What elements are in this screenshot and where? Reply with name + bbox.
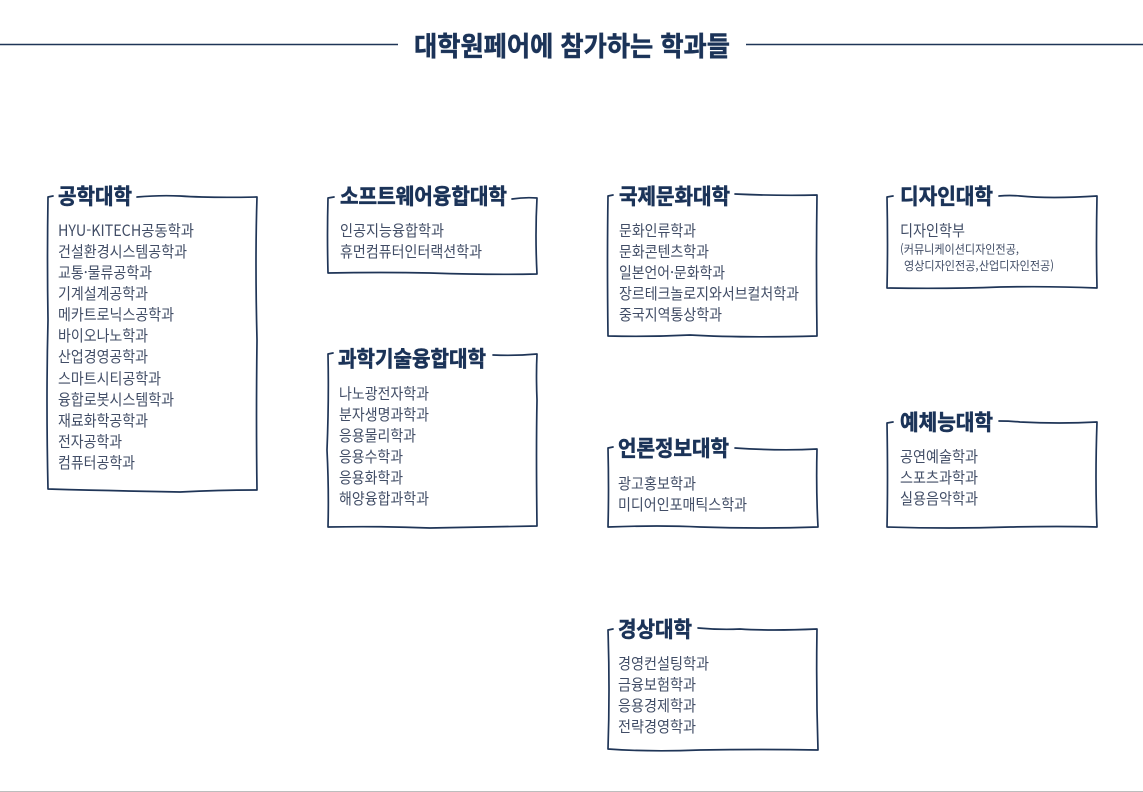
department list: 광고홍보학과 [618, 472, 696, 494]
heading: 소프트웨어융합대학 [340, 180, 507, 211]
title rule right [746, 44, 1143, 46]
department list: 융합로봇시스템학과 [58, 388, 174, 410]
title: 대학원페어에 참가하는 학과들 [414, 25, 730, 64]
department list: HYU-KITECH공동학과 [58, 219, 194, 241]
heading: 디자인대학 [900, 180, 993, 211]
department list: 건설환경시스템공학과 [58, 240, 187, 262]
panel frame [327, 353, 537, 528]
department list: 교통·물류공학과 [58, 261, 152, 283]
department list: 중국지역통상학과 [619, 303, 722, 325]
department list: 일본언어·문화학과 [619, 261, 725, 283]
heading: 언론정보대학 [618, 432, 729, 463]
department list: 장르테크놀로지와서브컬처학과 [619, 282, 799, 304]
department list: 스마트시티공학과 [58, 367, 161, 389]
department list: 스포츠과학과 [900, 466, 978, 488]
department list [58, 219, 194, 473]
department list: 나노광전자학과 [339, 382, 429, 404]
department list [619, 219, 799, 325]
title rule left [0, 44, 398, 46]
panel: 공학대학 [47, 180, 257, 492]
heading: 과학기술융합대학 [338, 342, 486, 374]
department list: 공연예술학과 [900, 445, 978, 467]
department list: 인공지능융합학과 [340, 219, 444, 241]
department list: 미디어인포매틱스학과 [618, 493, 747, 515]
department list: 문화콘텐츠학과 [619, 240, 709, 262]
department list: 분자생명과학과 [339, 403, 429, 425]
panel: 소프트웨어융합대학 [328, 180, 537, 274]
department list: 해양융합과학과 [339, 487, 429, 509]
department list [618, 472, 747, 515]
department list: 응용화학과 [339, 466, 403, 488]
department list: 전략경영학과 [618, 715, 696, 737]
department list [340, 219, 482, 262]
heading: 경상대학 [618, 613, 692, 644]
department list: 금융보험학과 [618, 673, 696, 695]
panel frame [608, 194, 817, 337]
panel: 예체능대학 [887, 406, 1097, 528]
panel: 디자인대학 [887, 180, 1097, 288]
department list: 응용경제학과 [618, 694, 696, 716]
panel: 과학기술융합대학 [327, 342, 537, 528]
department list: 기계설계공학과 [58, 282, 148, 304]
department list: 디자인학부 [900, 219, 965, 241]
panel frame [47, 196, 257, 492]
department list: 실용음악학과 [900, 487, 978, 509]
department list [339, 382, 429, 509]
heading: 국제문화대학 [619, 180, 730, 211]
department list: 전자공학과 [58, 430, 122, 452]
department list: 응용수학과 [339, 445, 403, 467]
panel frame [887, 196, 1097, 288]
heading: 예체능대학 [900, 406, 993, 437]
panel frame [608, 447, 818, 528]
panel: 국제문화대학 [608, 180, 817, 337]
department list: 산업경영공학과 [58, 345, 148, 367]
panel: 경상대학 [608, 613, 818, 751]
panel frame [887, 421, 1097, 528]
department list [900, 445, 978, 509]
department list: 메카트로닉스공학과 [58, 303, 174, 325]
panel frame [328, 197, 537, 274]
heading: 공학대학 [58, 180, 132, 211]
department list: 휴먼컴퓨터인터랙션학과 [340, 240, 482, 262]
department list [618, 652, 709, 737]
department list: 재료화학공학과 [58, 409, 148, 431]
department list: 응용물리학과 [339, 424, 416, 446]
footer rule [0, 790, 1143, 792]
panel: 언론정보대학 [608, 432, 818, 528]
department list: 바이오나노학과 [58, 324, 148, 346]
department list: (커뮤니케이션디자인전공, [900, 240, 1019, 258]
department list [900, 219, 1054, 274]
department list: 컴퓨터공학과 [58, 451, 135, 473]
department list: 문화인류학과 [619, 219, 696, 241]
panel frame [608, 628, 818, 751]
department list: 경영컨설팅학과 [618, 652, 709, 674]
department list: 영상디자인전공, 산업디자인전공) [904, 257, 1054, 274]
